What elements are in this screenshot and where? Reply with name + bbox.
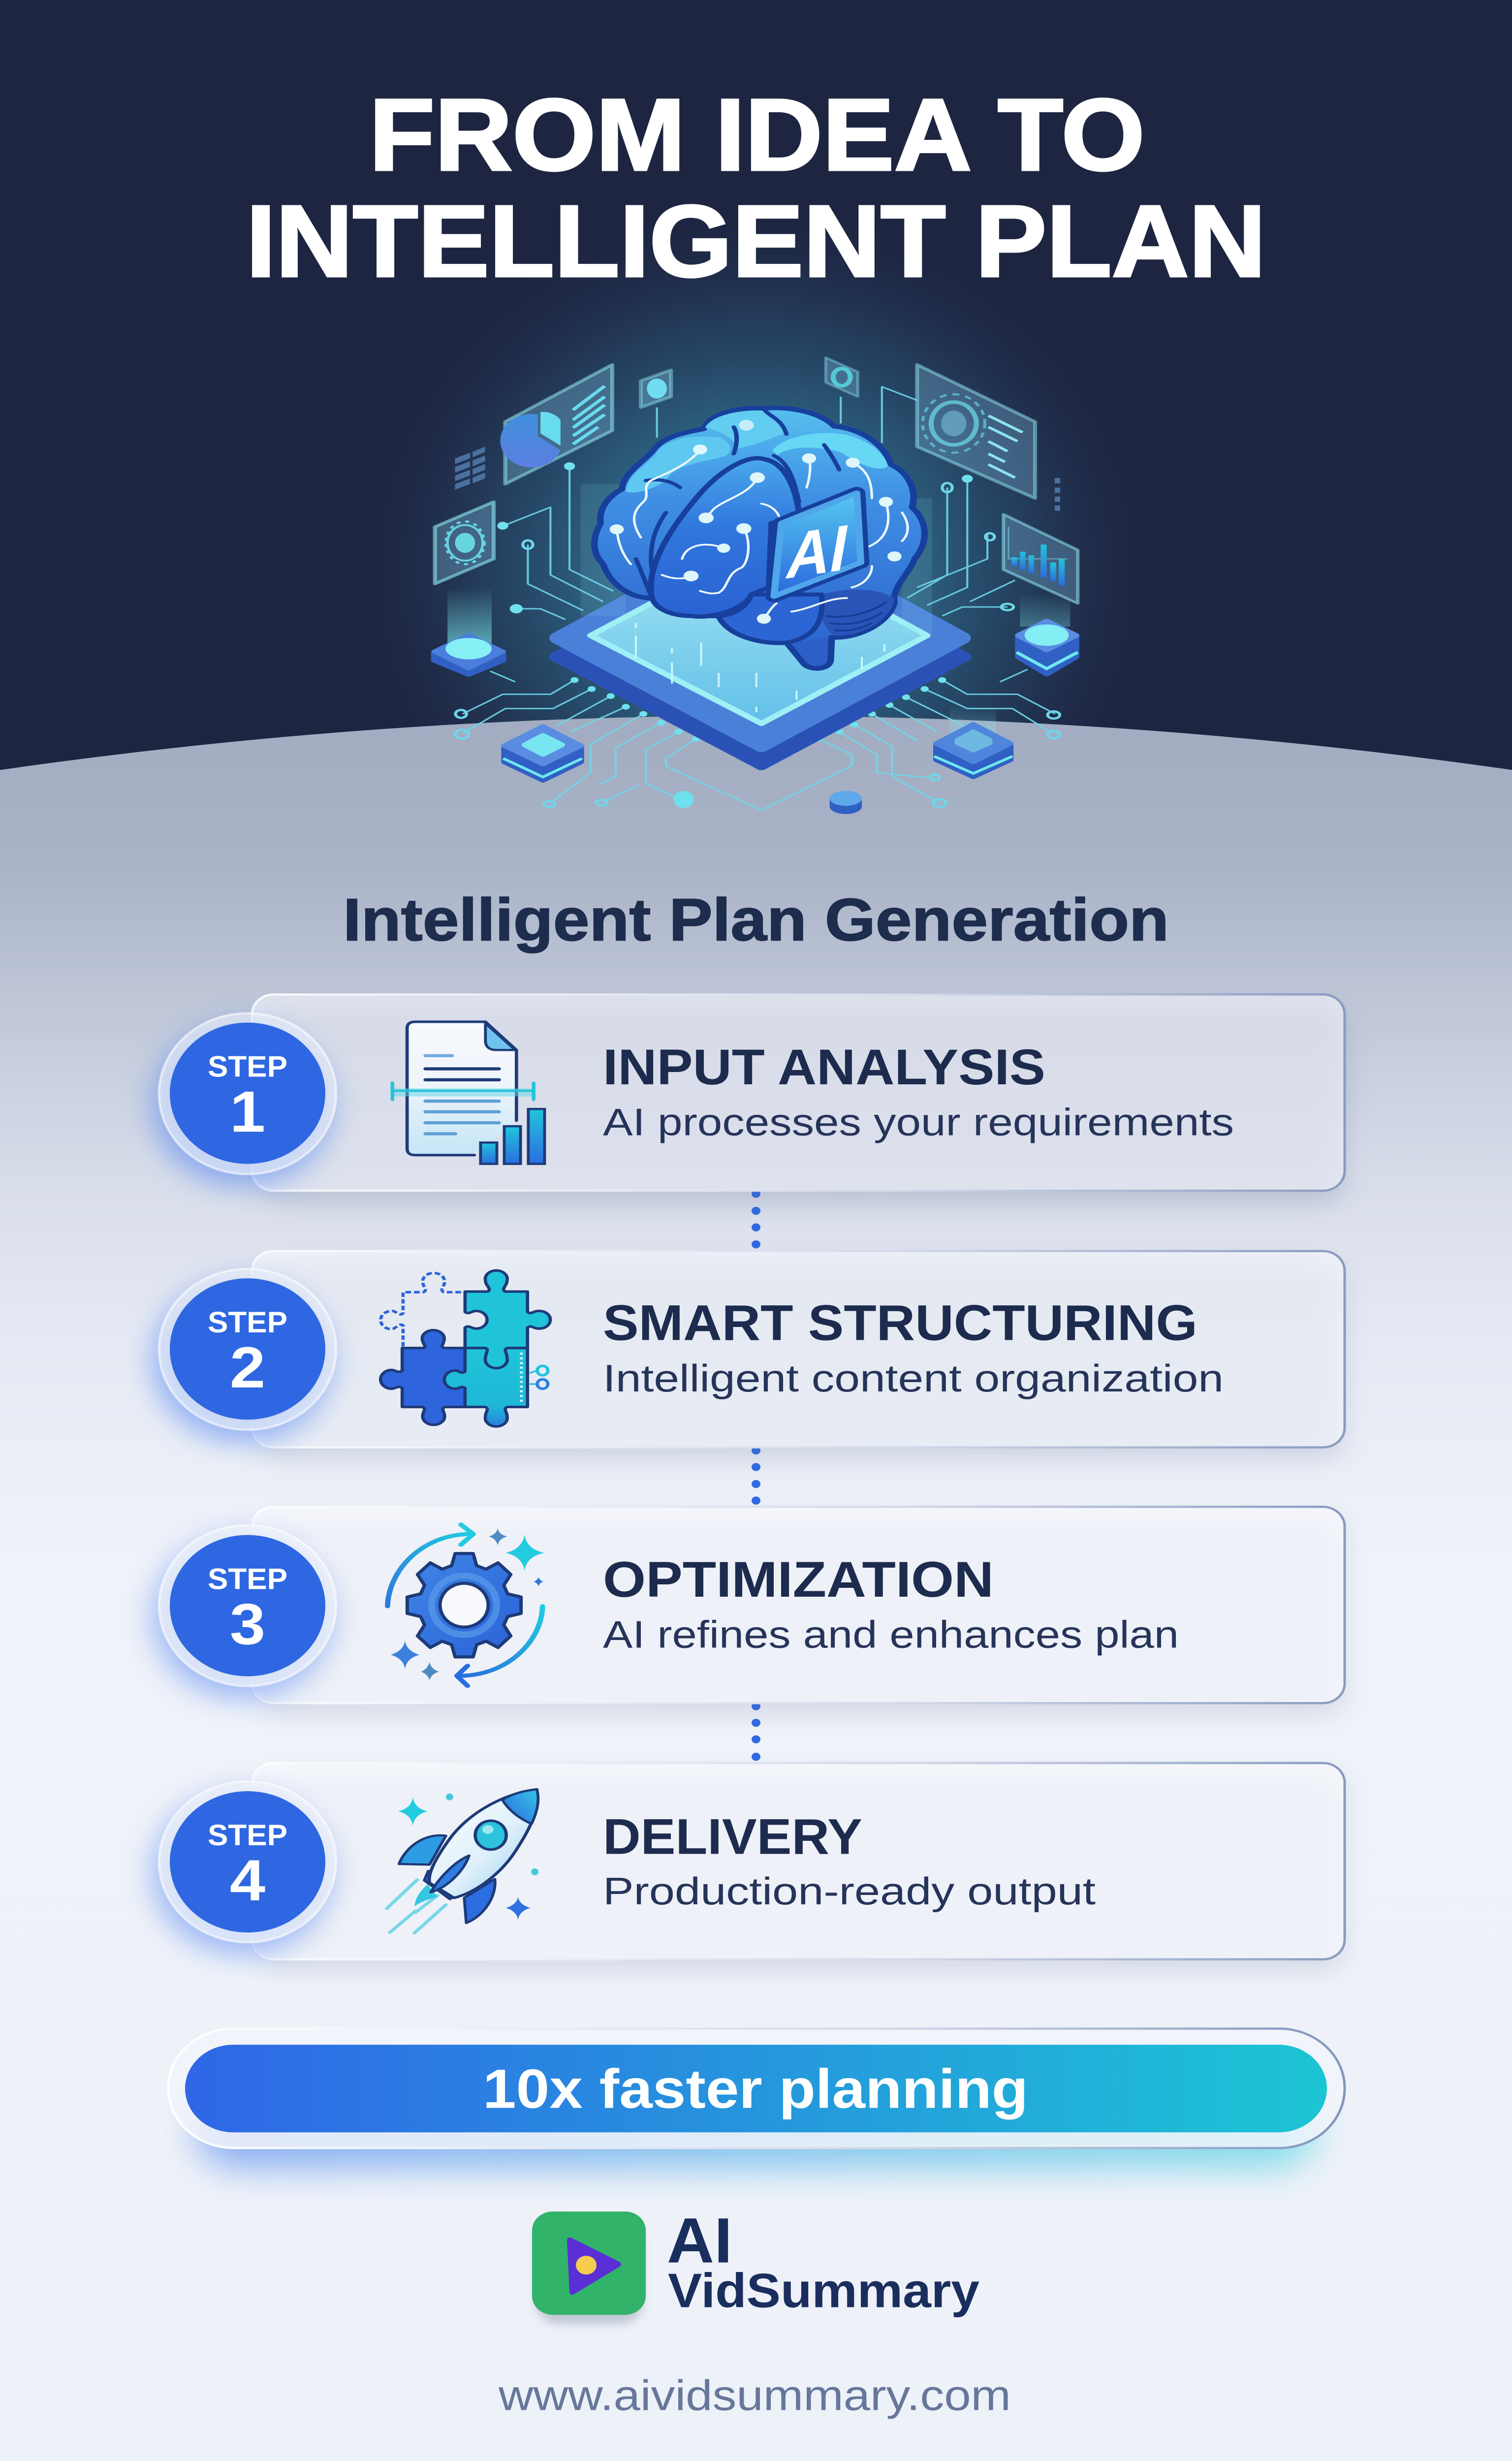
brain highlights (626, 437, 730, 493)
data grid right (1055, 478, 1060, 511)
bottom-right chip (934, 705, 1012, 777)
icon: document scan (392, 1022, 545, 1164)
section heading: Intelligent Plan Generation (343, 886, 1169, 953)
panel: step 3 optimization (153, 1507, 1345, 1715)
data panel: bar chart (1004, 514, 1078, 603)
step description: Intelligent content organization (603, 1357, 1224, 1400)
website url: www.aividsummary.com (498, 2371, 1011, 2419)
small round node (830, 791, 862, 814)
step badge (153, 1269, 336, 1443)
front lobe (651, 458, 799, 617)
step badge: 4 (230, 1848, 265, 1913)
step heading: INPUT ANALYSIS (603, 1039, 1045, 1095)
icon: rocket (387, 1789, 538, 1933)
glass pillars (581, 484, 932, 634)
lobe divider lines (636, 409, 839, 598)
panel: step 2 smart structuring (153, 1251, 1345, 1459)
glow behind the brain (295, 188, 1217, 814)
callout: 10x faster planning: 10x faster planning (483, 2058, 1028, 2120)
step badge: 2 (230, 1335, 265, 1400)
light lower sheet (0, 716, 1512, 2461)
top-right chip (1016, 595, 1078, 674)
brain stem (787, 637, 832, 668)
step heading: OPTIMIZATION (603, 1551, 994, 1608)
chip top plate (558, 529, 962, 746)
chip glass surface (591, 545, 927, 724)
logo mark (532, 2211, 646, 2315)
step description: AI refines and enhances plan (603, 1613, 1179, 1656)
step badge: STEP (208, 1563, 287, 1596)
step badge (153, 1525, 336, 1699)
icon: gear with arrows (387, 1525, 544, 1686)
step badge: STEP (208, 1306, 287, 1339)
title (246, 78, 1266, 298)
connector dots 1-2 (752, 1190, 760, 1248)
AI badge (774, 493, 861, 596)
step badge (153, 1781, 336, 1955)
step heading: DELIVERY (603, 1808, 862, 1864)
connector dots 2-3 (752, 1447, 760, 1505)
data panel: pie chart (500, 365, 612, 484)
data panel: small dot (641, 370, 671, 408)
wordmark: VidSummary (668, 2264, 979, 2317)
step description: Production-ready output (603, 1870, 1096, 1913)
logo: AI VidSummary (532, 2205, 979, 2324)
data panel: small ring (826, 357, 858, 397)
step heading: SMART STRUCTURING (603, 1294, 1197, 1351)
callout: 10x faster planning (168, 2029, 1345, 2169)
top-left chip (434, 635, 503, 675)
connector dots 3-4 (752, 1702, 760, 1761)
wordmark (667, 2205, 979, 2317)
chip base side (556, 545, 965, 765)
title: INTELLIGENT PLAN (246, 185, 1266, 298)
circuit nodes (497, 462, 973, 808)
brain (595, 408, 925, 668)
data panel: target (435, 502, 494, 584)
AI badge: AI (785, 511, 848, 592)
step badge: 1 (230, 1080, 265, 1144)
step description: AI processes your requirements (603, 1101, 1234, 1144)
icon: puzzle (380, 1270, 550, 1426)
circuit lines (463, 387, 1055, 810)
step badge: STEP (208, 1050, 287, 1083)
illustration: AI brain on chip (434, 357, 1078, 814)
bottom-left chip (503, 726, 582, 781)
data grid left (455, 446, 485, 490)
panel: step 4 delivery (153, 1763, 1345, 1971)
step badge: 3 (230, 1592, 265, 1657)
dark header background (0, 0, 1512, 805)
left light beam (447, 587, 492, 650)
brain veins (617, 450, 908, 619)
title: FROM IDEA TO (369, 78, 1145, 192)
step badge (153, 1013, 336, 1187)
wordmark: AI (667, 2205, 732, 2276)
step badge: STEP (208, 1819, 287, 1852)
panel: step 1 input analysis (153, 994, 1345, 1203)
cerebellum (819, 590, 894, 635)
data panel: radar and text (917, 365, 1035, 498)
lower lobe (719, 595, 822, 643)
